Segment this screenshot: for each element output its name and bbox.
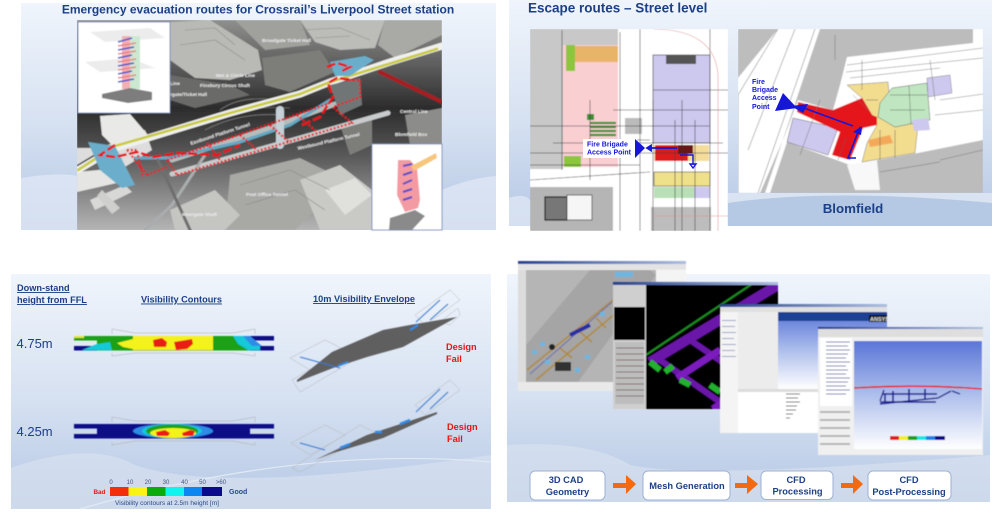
step: CFD Processing — [761, 471, 833, 500]
legend: visibility colour scale: 20 — [145, 480, 152, 486]
step: CFD Post-Processing — [868, 471, 951, 500]
panel: emergency evacuation routes — [21, 2, 496, 230]
station labels: rgate/Ticket Hall — [170, 92, 207, 98]
heading: evacuation routes: Emergency evacuation routes for Crossrail’s Liverpool Street station — [62, 2, 454, 16]
10m envelope bottom — [291, 380, 460, 472]
design fail bottom: Fail — [447, 434, 463, 444]
station labels: Westbound Platform Tunnel — [297, 132, 360, 152]
heading: escape routes: Escape routes – Street level — [528, 0, 707, 16]
design fail bottom: Design — [447, 422, 478, 432]
station labels: Met & Circle Line — [216, 73, 255, 79]
station labels: Line — [170, 81, 180, 87]
station labels: Finsbury Circus Shaft — [200, 83, 250, 89]
tunnels — [78, 46, 442, 230]
panel: escape routes street level — [509, 0, 992, 231]
heading: down-stand height: height from FFL — [17, 295, 87, 305]
Blomfield caption band: Blomfield — [823, 201, 883, 216]
contour strip 4.75m — [74, 329, 274, 356]
callout: fire brigade access point — [583, 139, 696, 168]
heading: down-stand height — [17, 283, 415, 305]
10m envelope top — [290, 290, 460, 392]
callout: fire brigade access, Blomfield: Point — [752, 104, 770, 111]
step: 3D CAD Geometry: 3D CAD — [549, 475, 584, 485]
legend: visibility colour scale: 30 — [163, 480, 170, 486]
callout: fire brigade access, Blomfield: Access — [752, 95, 777, 102]
screenshot: CFD processing — [720, 304, 889, 433]
step: CFD Post-Processing: CFD — [899, 475, 919, 485]
legend: visibility colour scale: Bad — [94, 489, 106, 496]
callout: fire brigade access, Blomfield — [752, 79, 862, 158]
right plan — [738, 29, 983, 193]
arrow — [841, 475, 863, 494]
legend: visibility colour scale — [94, 480, 247, 507]
legend: visibility colour scale: >60 — [216, 480, 227, 486]
callout: fire brigade access point: Fire Brigade — [587, 142, 628, 148]
legend: visibility colour scale: 0 — [109, 480, 113, 486]
step: 3D CAD Geometry — [530, 471, 605, 500]
screenshot: CFD post-processing — [818, 327, 983, 455]
route dotted — [127, 80, 360, 178]
arrow — [613, 475, 636, 494]
panel: CFD workflow — [507, 261, 990, 502]
station labels — [170, 38, 428, 218]
Blomfield caption band — [728, 193, 992, 226]
inset: stair core upper — [78, 22, 170, 113]
step: CFD Processing: CFD — [786, 475, 806, 485]
design fail top: Design — [446, 342, 477, 352]
callout: fire brigade access, Blomfield: Brigade — [752, 87, 778, 94]
label: 4.75m: 4.75m — [16, 336, 53, 351]
step: Mesh Generation — [643, 471, 730, 500]
step: CFD Processing: Processing — [772, 486, 823, 496]
step: Mesh Generation: Mesh Generation — [649, 481, 725, 491]
legend: visibility colour scale: 50 — [199, 480, 206, 486]
design fail top: Fail — [446, 354, 462, 364]
station labels: Broadgate Ticket Hall — [262, 38, 311, 44]
station labels: Post Office Tunnel — [246, 192, 288, 198]
legend: visibility colour scale: Visibility contours at 2.5m height [m] — [115, 500, 219, 507]
inset: stair core lower — [372, 144, 442, 230]
arrow — [735, 475, 758, 494]
legend: visibility colour scale: Good — [229, 489, 247, 496]
screenshot: 3D CAD — [518, 261, 686, 391]
heading: down-stand height: 10m Visibility Envelope — [313, 294, 415, 304]
legend: visibility colour scale: 40 — [181, 480, 188, 486]
callout: fire brigade access point: Access Point — [587, 150, 632, 156]
screenshot: mesh generation — [613, 282, 778, 409]
step: CFD Post-Processing: Post-Processing — [872, 487, 946, 497]
station labels: Eastbound Platform Tunnel — [190, 122, 251, 147]
heading: down-stand height: Visibility Contours — [141, 294, 222, 304]
3D station cutaway — [77, 20, 442, 230]
panel: visibility contours — [11, 274, 491, 509]
contour strip 4.25m — [74, 417, 274, 445]
callout: fire brigade access, Blomfield: Fire — [752, 79, 765, 86]
step: 3D CAD Geometry: Geometry — [546, 487, 590, 497]
screenshot: CFD processing: ANSYS — [870, 317, 889, 323]
station labels: Moorgate Shaft — [182, 212, 217, 218]
legend: visibility colour scale: 10 — [127, 480, 134, 486]
heading: down-stand height: Down-stand — [17, 283, 70, 293]
station labels: Central Line — [400, 109, 428, 115]
station labels: Blomfield Box — [395, 132, 428, 138]
left plan — [530, 29, 728, 231]
label: 4.25m: 4.25m — [16, 424, 53, 439]
